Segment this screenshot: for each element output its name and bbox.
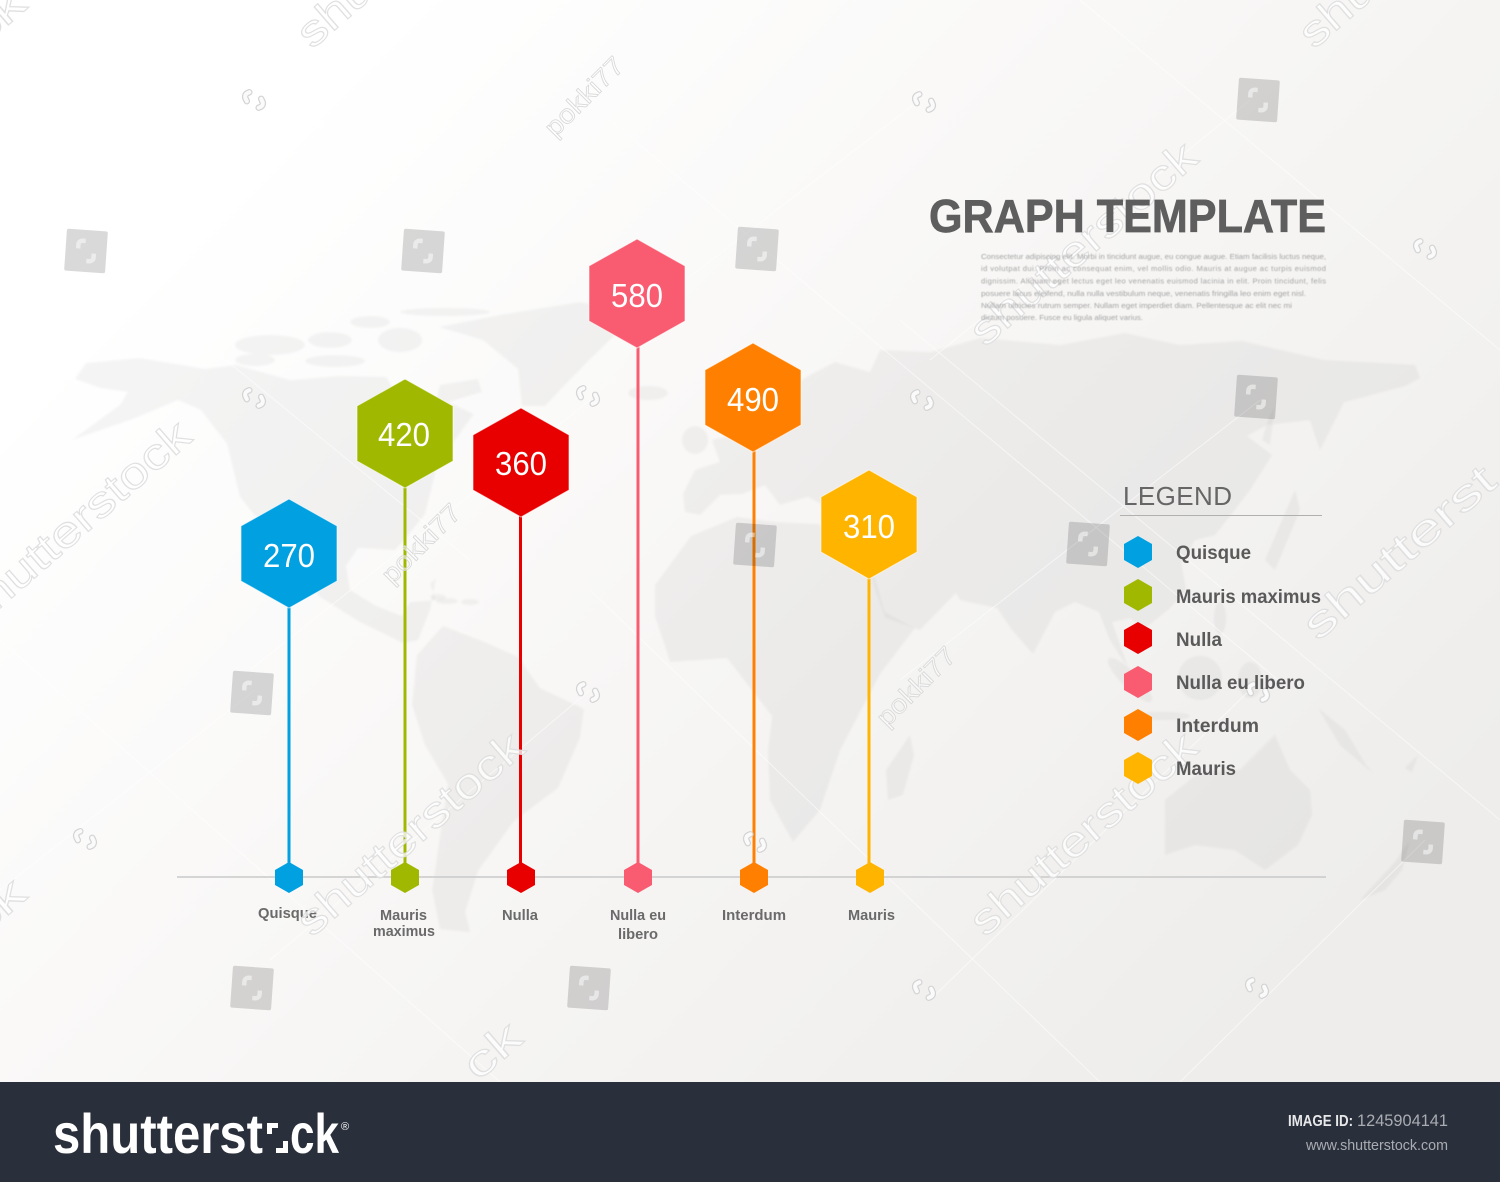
- bar: Nulla 360: 360: [495, 445, 547, 482]
- shutterstock logo: ck: [290, 1102, 340, 1165]
- description paragraph: Nullam ultricies rutrum semper. Nullam eget imperdiet diam. Pellentesque ac elit nec mi: [981, 301, 1292, 310]
- watermark logo squares: [64, 78, 1445, 1010]
- legend item: Nulla: [1124, 622, 1222, 654]
- Caribbean: [430, 594, 479, 605]
- description paragraph: [981, 252, 1326, 322]
- New Zealand: [1360, 755, 1418, 900]
- bar: Quisque 270: [241, 499, 337, 893]
- bar: Interdum 490: [705, 343, 801, 893]
- legend item: Quisque: Quisque: [1176, 542, 1251, 564]
- axis labels: [258, 905, 895, 943]
- legend item: Interdum: [1124, 709, 1259, 741]
- watermark text: shutterstock: shutterstock: [287, 722, 534, 946]
- website url: www.shutterstock.com: [1305, 1138, 1448, 1154]
- axis labels: Interdum: [722, 907, 786, 924]
- image id: 1245904141: [1357, 1112, 1448, 1130]
- axis labels: Nulla eu: [610, 907, 666, 924]
- North America: [72, 358, 482, 643]
- watermark text: shutterstock: shutterstock: [960, 722, 1207, 946]
- legend item: Nulla eu libero: [1124, 666, 1305, 698]
- legend item: Interdum: Interdum: [1176, 715, 1259, 737]
- bar: Mauris 310: 310: [843, 508, 895, 545]
- description paragraph: dignissim. Aliquam eget lectus eget leo venenatis euismod lacinia in elit. Proin tincidunt, felis: [981, 276, 1326, 286]
- Africa: [655, 517, 915, 842]
- legend item: Mauris: [1124, 752, 1236, 784]
- baseline axis: [177, 876, 1326, 878]
- axis labels: libero: [618, 926, 658, 943]
- axis labels: Mauris: [848, 907, 895, 924]
- watermark text: shutterstock: ck: [453, 1012, 532, 1090]
- shutterstock logo: shutterst: [53, 1102, 263, 1165]
- Greenland: [439, 302, 632, 406]
- title: GRAPH TEMPLATE: [929, 190, 1326, 242]
- axis labels: Quisque: [258, 905, 317, 922]
- footer bar: [0, 1082, 1500, 1182]
- British Isles: [682, 426, 708, 454]
- Australia: [1165, 735, 1312, 870]
- watermark text: pokki77: pokki77: [870, 640, 962, 732]
- image id: IMAGE ID:: [1288, 1113, 1353, 1130]
- watermark text: shutterstock: shutterst: [1293, 456, 1500, 650]
- description paragraph: posuere lacus eleifend, nulla nulla vestibulum neque, venenatis fringilla leo enim eget nisl.: [981, 289, 1306, 298]
- bar: Nulla eu libero 580: 580: [611, 277, 663, 314]
- watermark text: pokki77: pokki77: [375, 497, 467, 589]
- bar: Interdum 490: 490: [727, 381, 779, 418]
- legend item: Quisque: [1124, 536, 1251, 568]
- Canadian arctic islands: [235, 308, 490, 367]
- description paragraph: id volutpat dui. Proin ac consequat enim, vel mollis odio. Mauris at augue ac turpis euismod: [981, 264, 1326, 273]
- Madagascar: [886, 735, 914, 800]
- Japan and Sakhalin: [1262, 405, 1300, 570]
- image id: [1288, 1112, 1448, 1130]
- bar: Nulla 360: [473, 408, 569, 893]
- description paragraph: dictum posuere. Fusce eu ligula aliquet varius.: [981, 313, 1143, 322]
- shutterstock logo: ®: [341, 1121, 349, 1133]
- legend heading: LEGEND: [1123, 481, 1232, 511]
- watermark text: pokki77: pokki77: [538, 50, 630, 142]
- watermark text: shutterstock: shutterstock: [960, 132, 1207, 356]
- description paragraph: Consectetur adipiscing elit. Morbi in tincidunt augue, eu congue augue. Etiam facilisis luctus neque,: [981, 252, 1326, 261]
- bar: Mauris 310: [821, 470, 917, 893]
- bar: Mauris maximus 420: 420: [378, 416, 430, 453]
- legend item: Mauris maximus: [1124, 579, 1321, 611]
- legend item: Mauris maximus: Mauris maximus: [1176, 586, 1321, 608]
- South America: [412, 626, 584, 932]
- watermark outline icons: [75, 89, 1435, 1001]
- legend: [1120, 481, 1322, 784]
- axis labels: maximus: [373, 923, 435, 940]
- bar: Quisque 270: 270: [263, 537, 315, 574]
- Eurasia: [683, 333, 1420, 668]
- legend item: Nulla eu libero: Nulla eu libero: [1176, 672, 1305, 694]
- Iceland: [628, 386, 668, 400]
- chart: lollipop hexagons: [177, 239, 1326, 893]
- Indonesian islands: [1103, 602, 1262, 720]
- bar: Mauris maximus 420: [357, 379, 453, 893]
- axis labels: Nulla: [502, 907, 539, 924]
- watermark text: pokki77: [375, 50, 962, 732]
- axis labels: Mauris: [380, 907, 427, 924]
- New Guinea: [1318, 708, 1375, 775]
- legend item: Mauris: Mauris: [1176, 758, 1236, 780]
- bar: Nulla eu libero 580: [589, 239, 685, 893]
- legend item: Nulla: Nulla: [1176, 629, 1222, 651]
- world map background: [72, 302, 1420, 932]
